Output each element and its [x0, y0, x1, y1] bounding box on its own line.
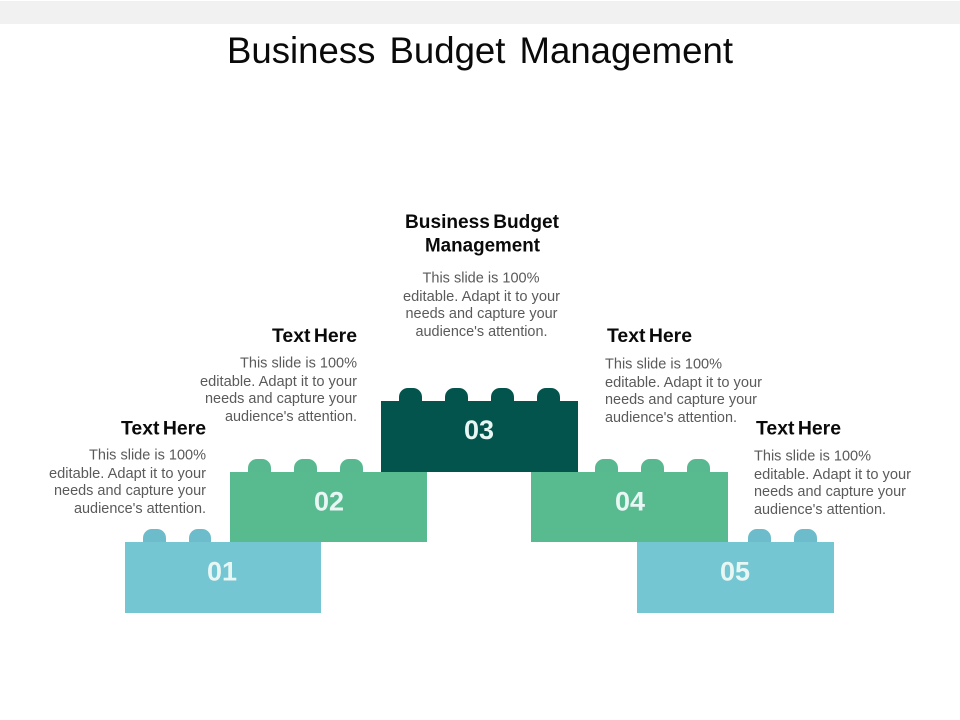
brick 04: [531, 459, 728, 542]
text block 05: audience's attention.: [754, 501, 886, 518]
text block 03: needs and capture your: [406, 305, 558, 322]
text block 05: editable. Adapt it to your: [754, 466, 911, 483]
brick 04: 04: [615, 486, 645, 516]
text block 05: needs and capture your: [754, 483, 906, 500]
text block 04: editable. Adapt it to your: [605, 374, 762, 391]
text block 05: [754, 418, 911, 518]
brick 05: 05: [720, 556, 750, 586]
text block 02: needs and capture your: [205, 390, 357, 407]
text block 03: This slide is 100%: [422, 270, 540, 286]
text block 04: needs and capture your: [605, 391, 757, 408]
text block 02: Text Here: [272, 326, 357, 347]
text block 03: Business Budget: [405, 212, 560, 233]
text block 04: [605, 326, 762, 426]
text block 02: This slide is 100%: [240, 354, 357, 372]
text block 05: Text Here: [756, 418, 841, 440]
text block 01: [49, 418, 206, 517]
brick 02: [230, 459, 427, 542]
brick 05: [637, 529, 834, 613]
text block 02: [200, 326, 357, 425]
brick 03: 03: [464, 415, 494, 445]
brick 02: 02: [314, 486, 344, 516]
text block 01: needs and capture your: [54, 482, 206, 499]
text block 03: Management: [425, 236, 541, 256]
text block 02: editable. Adapt it to your: [200, 373, 357, 390]
text block 01: Text Here: [121, 418, 206, 440]
brick 01: 01: [207, 556, 237, 586]
title: Business Budget Management: [227, 30, 734, 71]
brick 03: [381, 388, 578, 472]
text block 04: This slide is 100%: [605, 356, 722, 372]
text block 03: audience's attention.: [416, 323, 548, 340]
text block 01: audience's attention.: [74, 500, 206, 517]
top grey band: [0, 1, 960, 24]
text block 03: editable. Adapt it to your: [403, 288, 560, 305]
text block 03: [403, 212, 560, 340]
text block 01: editable. Adapt it to your: [49, 465, 206, 482]
text block 05: This slide is 100%: [754, 448, 871, 464]
text block 04: audience's attention.: [605, 409, 737, 426]
brick 01: [125, 529, 321, 613]
text block 01: This slide is 100%: [89, 446, 206, 464]
text block 04: Text Here: [607, 326, 692, 347]
text block 02: audience's attention.: [225, 408, 357, 425]
